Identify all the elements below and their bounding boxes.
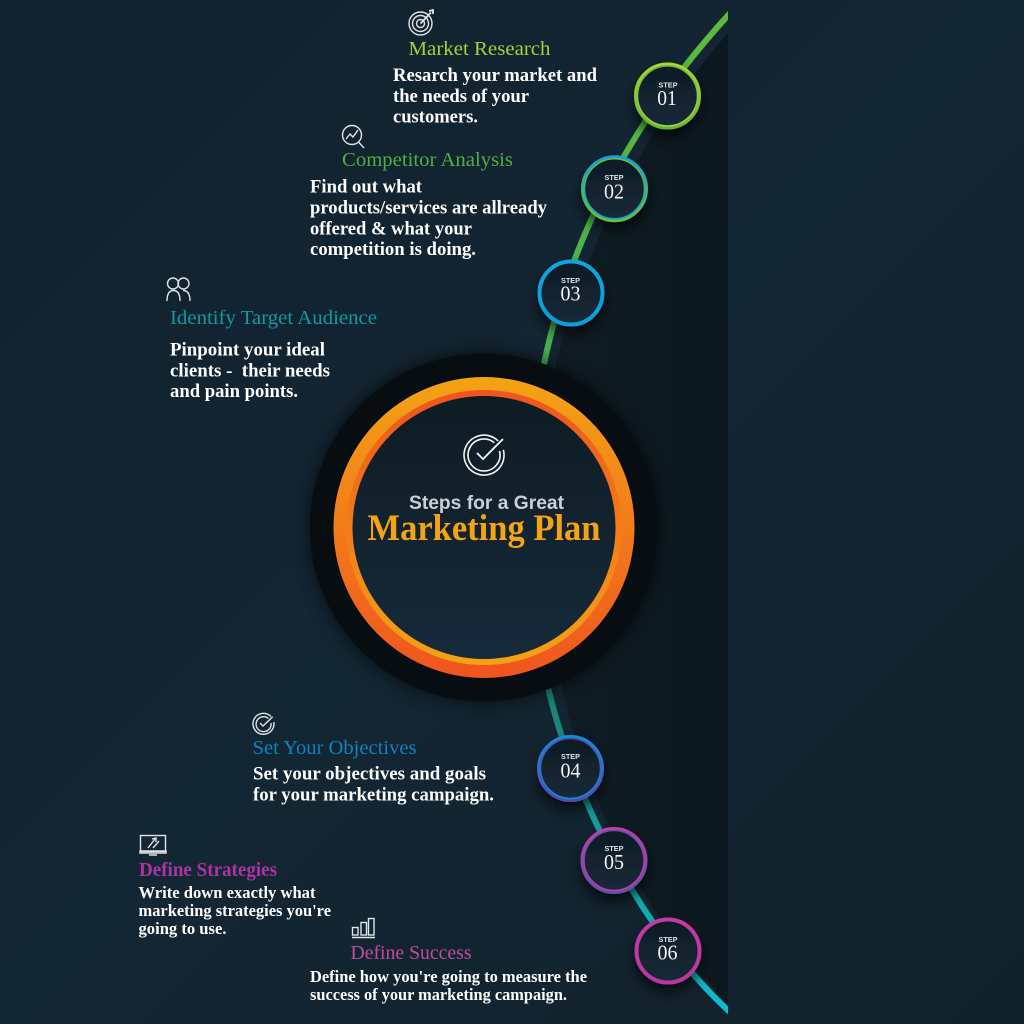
icon: magnifier chart	[342, 126, 364, 148]
step 04 badge	[538, 736, 602, 800]
text: define success: success of your marketing campaign.	[310, 985, 567, 1004]
text: market research: the needs of your	[393, 87, 529, 107]
icon: target with arrow	[409, 10, 433, 35]
text: competitor analysis: competition is doing.	[310, 240, 476, 260]
text: define strategies: Write down exactly what	[138, 883, 316, 902]
text: set your objectives: Set your objectives and goals	[253, 764, 486, 784]
text: identify target audience: and pain points.	[170, 382, 298, 402]
text: define strategies: going to use.	[138, 919, 226, 938]
text: define success: Define how you're going to measure the	[310, 967, 587, 986]
step 03 badge: 03	[560, 282, 580, 306]
step 01 badge	[636, 64, 700, 128]
step 03 badge	[540, 262, 602, 324]
text: market research: customers.	[393, 108, 478, 128]
step 03 badge: STEP	[561, 276, 580, 285]
step 06 badge	[636, 920, 700, 982]
heading: market research: Market Research	[408, 38, 550, 60]
step 02 badge	[582, 157, 646, 221]
step 02 badge: STEP	[604, 173, 624, 182]
step 01 badge: STEP	[658, 80, 678, 89]
step 06 badge: STEP	[658, 935, 678, 944]
step 04 badge: STEP	[561, 752, 580, 761]
icon: check target	[253, 713, 274, 734]
text: define strategies	[138, 883, 331, 938]
text: define strategies: marketing strategies you're	[138, 901, 331, 920]
text: competitor analysis: Find out what	[310, 178, 423, 198]
text: market research	[393, 66, 598, 128]
heading: competitor analysis: Competitor Analysis	[342, 149, 513, 171]
dark panel right of curve	[556, 33, 728, 1005]
heading: define strategies: Define Strategies	[139, 859, 277, 881]
step 04 badge: 04	[560, 758, 581, 782]
text: competitor analysis	[310, 178, 548, 260]
step 05 badge	[582, 828, 646, 892]
icon: central check target	[464, 435, 504, 475]
heading: marketing plan: Marketing Plan	[368, 508, 601, 549]
heading: define success: Define Success	[350, 942, 472, 964]
icon: bar chart	[352, 918, 375, 938]
text: market research: Resarch your market and	[393, 66, 598, 86]
step 05 badge: 05	[604, 850, 624, 874]
text: define success	[310, 967, 587, 1004]
heading: steps for a great: Steps for a Great	[409, 493, 565, 514]
icon: people	[167, 278, 190, 301]
text: identify target audience: clients - their needs	[170, 362, 330, 382]
step 01 badge: 01	[657, 86, 677, 110]
step 06 badge: 06	[658, 940, 678, 964]
text: set your objectives: for your marketing campaign.	[253, 786, 494, 806]
text: competitor analysis: products/services are allready	[310, 198, 548, 218]
text: set your objectives	[253, 764, 494, 806]
text: competitor analysis: offered & what your	[310, 220, 472, 240]
step 05 badge: STEP	[604, 844, 624, 853]
heading: identify target audience: Identify Target Audience	[170, 307, 377, 329]
timeline curve	[544, 11, 732, 1014]
icon: monitor with arrows	[140, 836, 166, 855]
step 02 badge: 02	[604, 180, 624, 204]
text: identify target audience: Pinpoint your ideal	[170, 340, 325, 360]
central badge	[310, 354, 658, 702]
text: identify target audience	[170, 340, 330, 402]
heading: set your objectives: Set Your Objectives	[252, 737, 417, 759]
